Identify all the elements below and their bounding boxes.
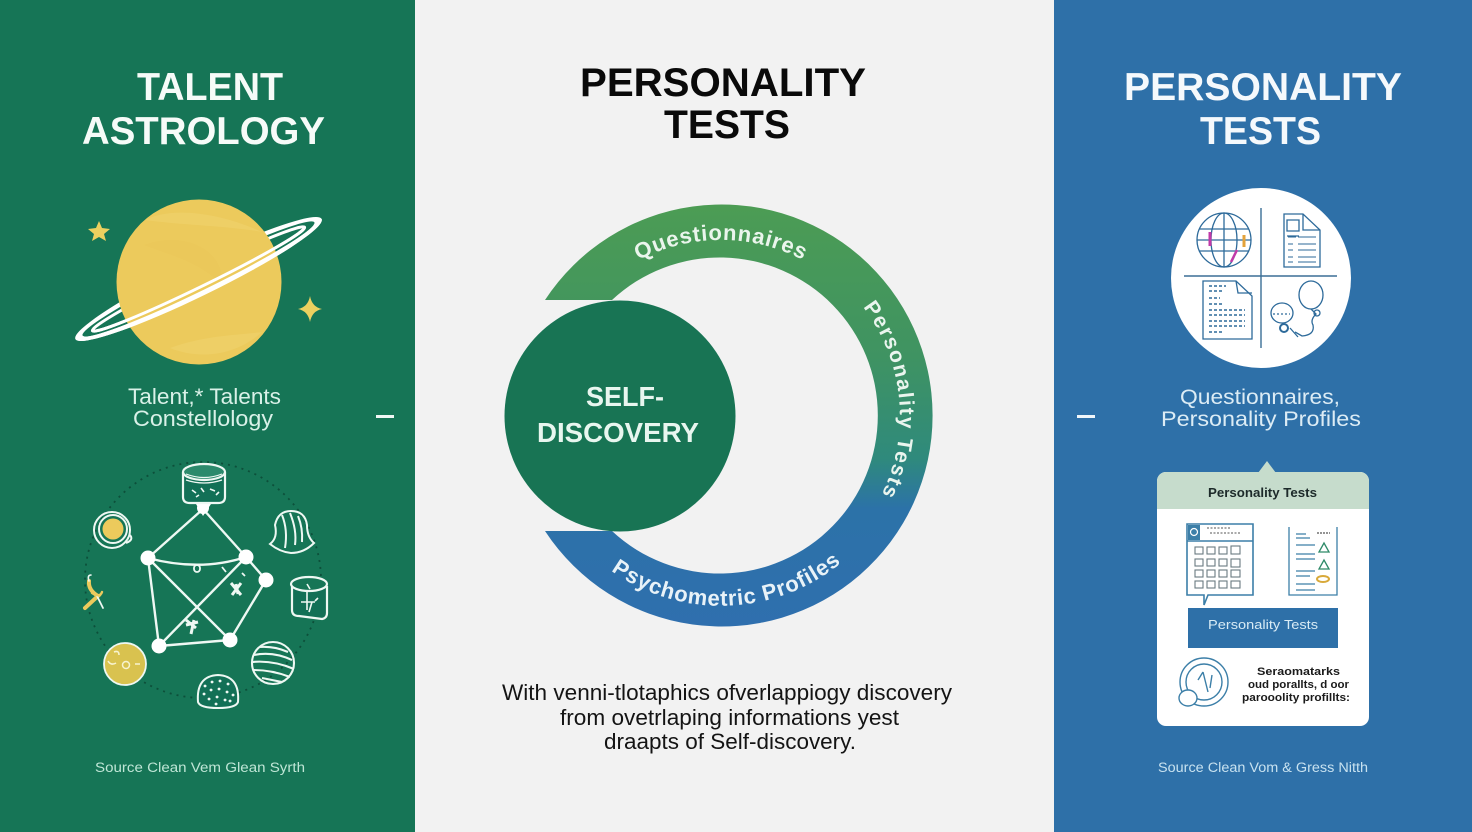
icon: data sheet	[1203, 281, 1252, 339]
icon: gold star	[88, 221, 110, 241]
source note right: Source Clean Vom & Gress Nitth	[1158, 760, 1368, 775]
icon: four-part test circle	[1171, 188, 1351, 368]
icon: gold sparkle	[298, 296, 322, 322]
centre circle: self-discovery	[504, 300, 736, 532]
icon: form grid	[1187, 524, 1253, 605]
divider dash left	[376, 415, 394, 418]
ring label: personality tests: Personality Tests	[864, 300, 915, 497]
icon: checklist	[1289, 527, 1337, 595]
ring label: questionnaires: Questionnaires	[635, 224, 806, 260]
description text: With venni-tlotaphics ofverlappiogy discovery	[502, 680, 952, 705]
diagram: talent constellation	[85, 462, 327, 708]
icon: coin with orbit	[94, 512, 131, 548]
card small text: oud porallts, d oor	[1248, 679, 1350, 691]
centre circle: self-discovery: DISCOVERY	[537, 417, 699, 448]
icon: ringed planet	[68, 200, 329, 364]
heading: personality tests	[580, 61, 866, 147]
icon: hair	[270, 511, 314, 553]
centre circle: self-discovery: SELF-	[586, 381, 664, 412]
caption: questionnaires	[1161, 386, 1361, 431]
icon: globe	[1197, 213, 1251, 267]
caption: questionnaires: Questionnaires,	[1180, 386, 1340, 409]
description text: from ovetrlaping informations yest	[560, 705, 899, 730]
caption: talents: Talent,* Talents	[128, 384, 281, 409]
blue bar label	[1188, 608, 1338, 648]
caption: talents	[128, 384, 281, 431]
card title: Personality Tests	[1208, 486, 1317, 500]
panel: talent astrology	[0, 0, 415, 832]
description text	[502, 680, 952, 754]
card small text	[1242, 666, 1350, 704]
small constellation glyphs	[186, 565, 245, 634]
heading: personality tests right: TESTS	[1200, 110, 1321, 153]
constellation lines	[148, 509, 266, 646]
divider dash right	[1077, 415, 1095, 418]
heading: personality tests right	[1124, 66, 1402, 153]
panel: personality tests centre	[502, 61, 952, 754]
icon: balloon and speech	[1271, 281, 1323, 337]
heading: personality tests: TESTS	[664, 103, 790, 147]
icon: document top right	[1284, 214, 1320, 267]
icon: top cylinder	[183, 464, 225, 503]
heading: talent astrology: TALENT	[137, 66, 283, 109]
icon: striped sphere	[252, 642, 294, 684]
heading: personality tests right: PERSONALITY	[1124, 66, 1402, 109]
card: personality tests	[1157, 461, 1369, 726]
panel: personality tests right	[1054, 0, 1472, 832]
heading: talent astrology	[82, 66, 325, 153]
description text: draapts of Self-discovery.	[604, 729, 856, 754]
icon: dotted dome	[198, 675, 238, 708]
blue bar label: Personality Tests	[1208, 617, 1319, 632]
venn ring	[545, 204, 933, 626]
caption: questionnaires: Personality Profiles	[1161, 408, 1361, 431]
constellation nodes	[140, 502, 274, 654]
card small text: Seraomatarks	[1257, 666, 1340, 678]
ring label: psychometric profiles: Psychometric Profiles	[612, 556, 839, 606]
heading: talent astrology: ASTROLOGY	[82, 110, 325, 153]
icon: yellow figure	[85, 575, 103, 608]
source note left: Source Clean Vem Glean Syrth	[95, 760, 305, 775]
icon: yellow planet	[104, 643, 146, 685]
heading: personality tests: PERSONALITY	[580, 61, 866, 105]
card small text: parooolity profillts:	[1242, 692, 1350, 704]
caption: talents: Constellology	[133, 406, 273, 431]
icon: mind dial	[1179, 658, 1228, 706]
icon: cup cylinder	[291, 577, 327, 619]
